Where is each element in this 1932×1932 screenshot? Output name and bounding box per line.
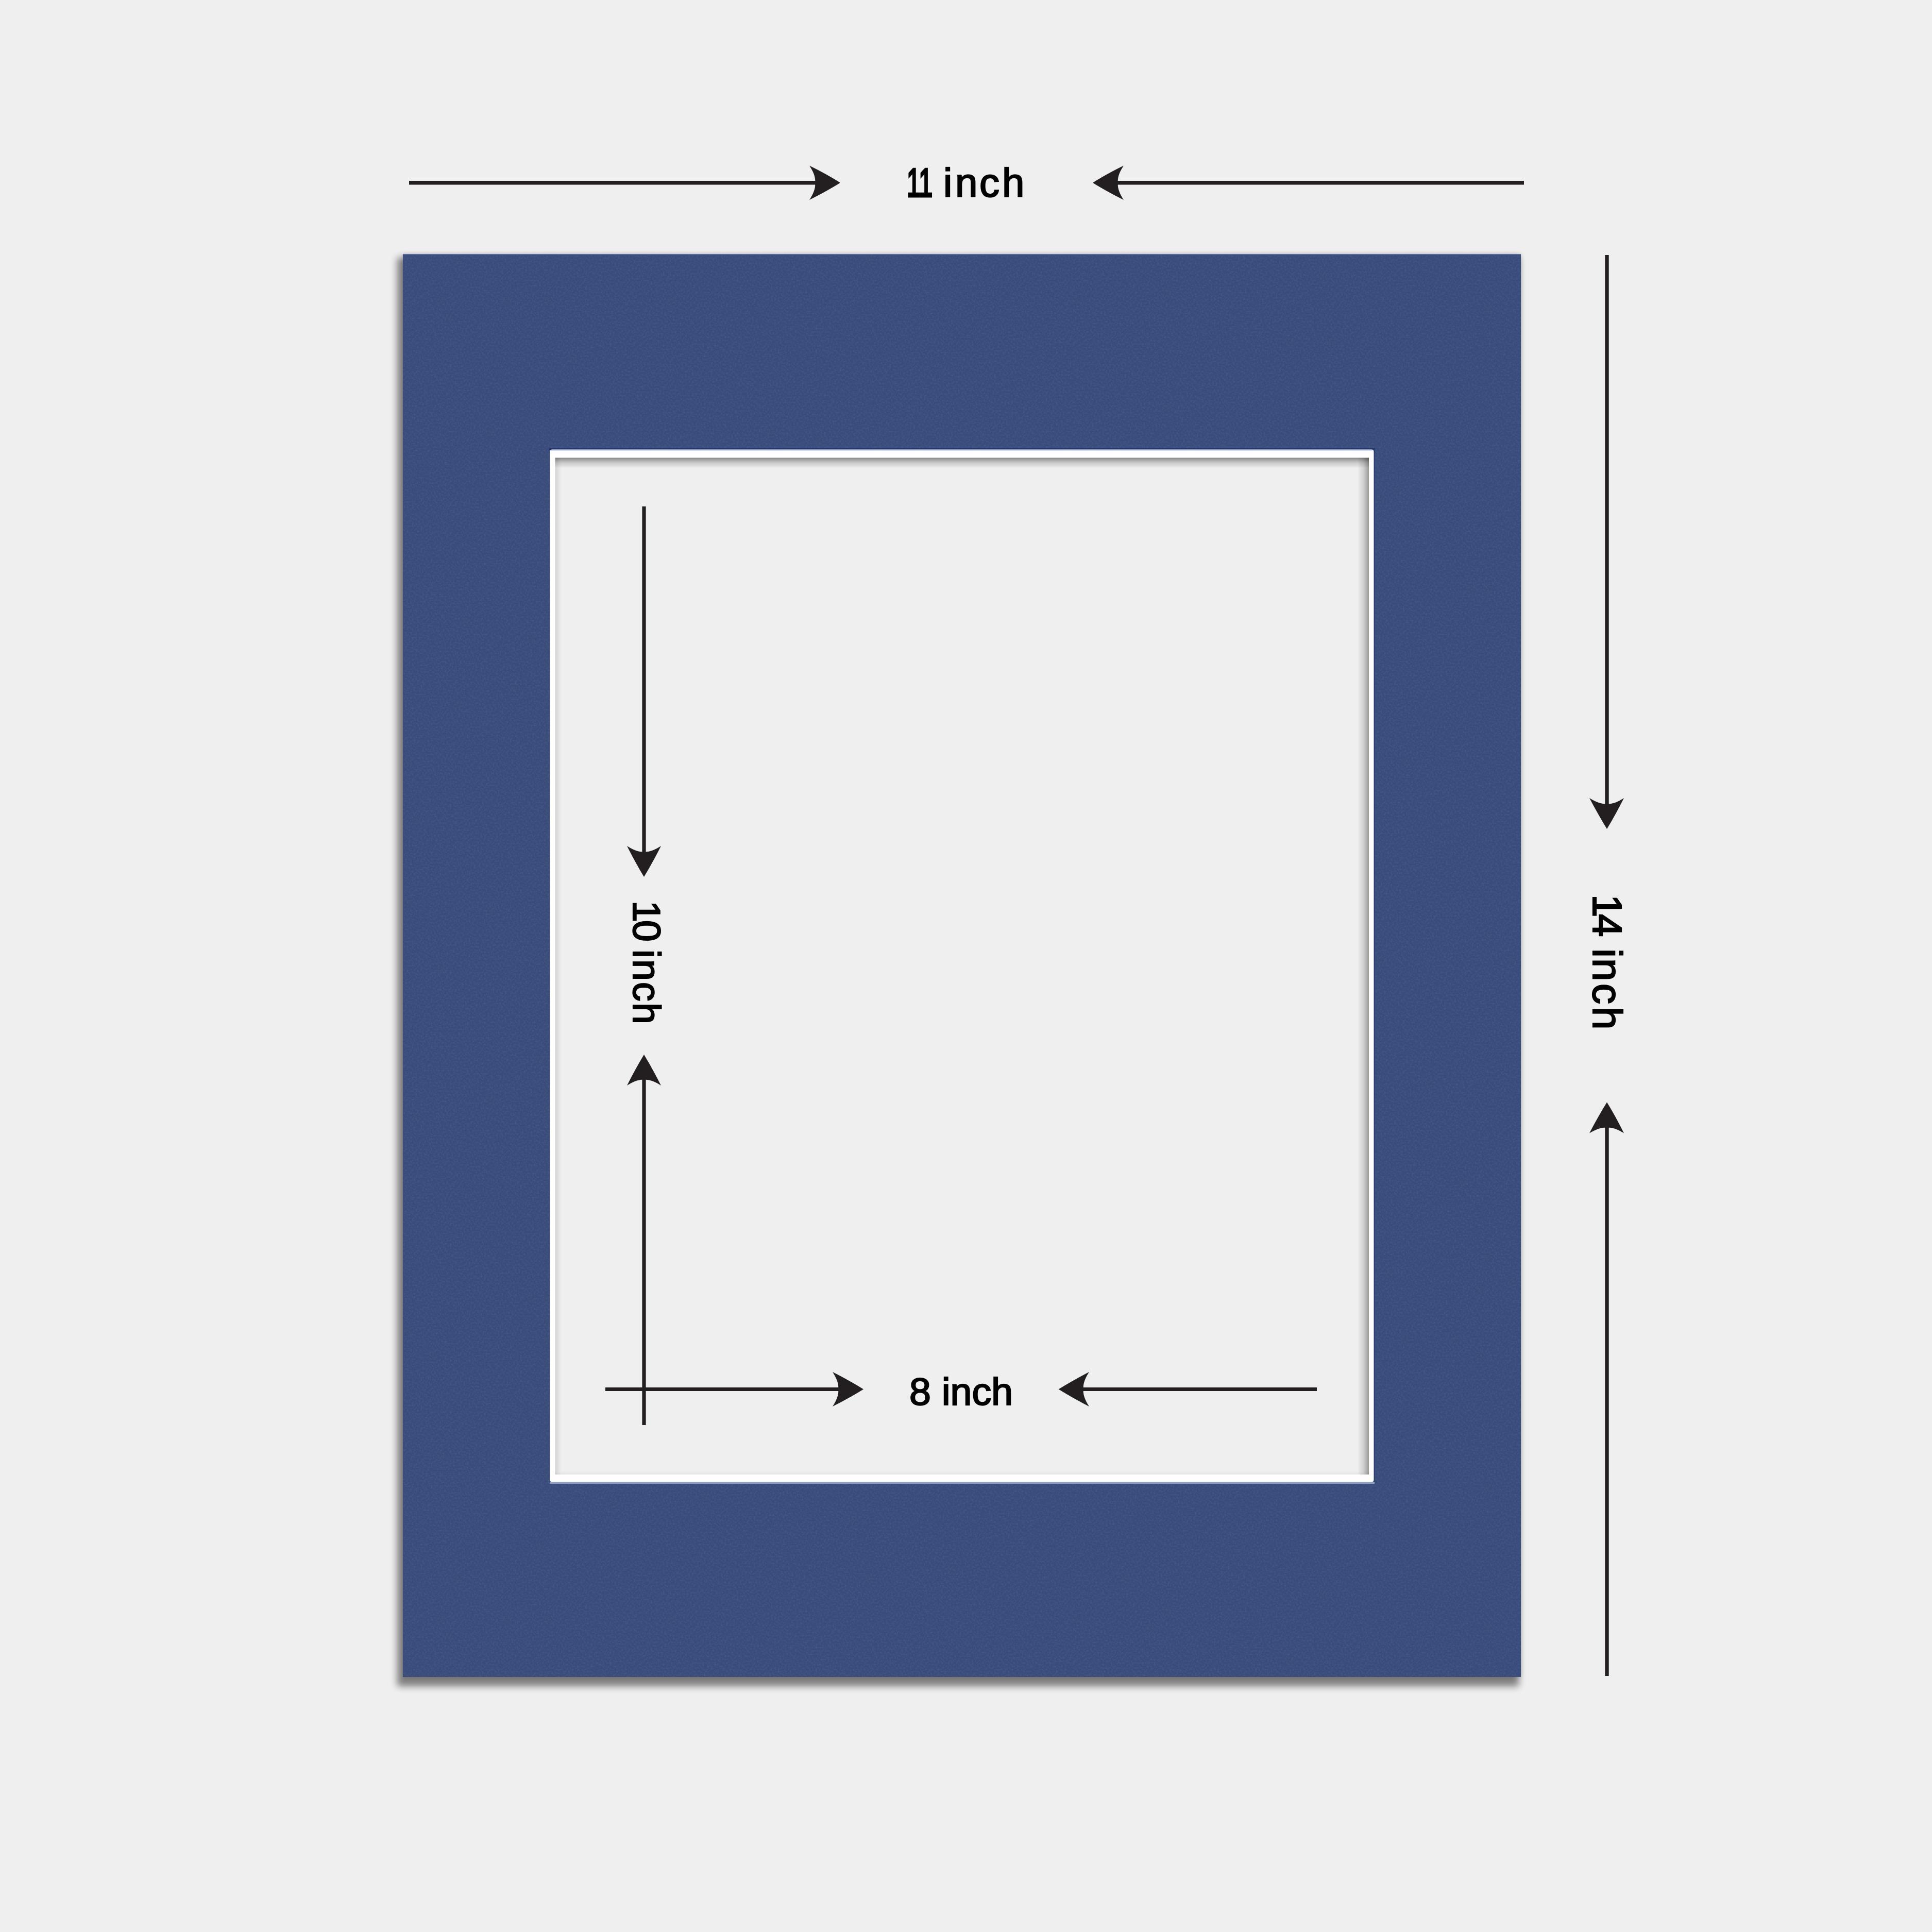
- arrow: inner height, upper segment: [627, 506, 661, 877]
- arrow: inner width, left segment: [605, 1372, 863, 1406]
- heading: 11 inch: inch: [943, 160, 1024, 206]
- window opening with inner shadows: [555, 457, 1369, 1475]
- arrow: top width, left segment: [409, 166, 840, 200]
- panel: blue mat board: [397, 254, 1521, 1686]
- arrow: top width, right segment: [1093, 166, 1524, 200]
- arrow: outer height, upper segment: [1589, 255, 1624, 829]
- label: 10 inch: 10 inch: [625, 901, 668, 1024]
- label: 14 inch: 14 inch: [1584, 894, 1630, 1029]
- heading: 11 inch: 11: [907, 160, 933, 206]
- heading: 11 inch: [907, 160, 1024, 206]
- arrow: inner height, lower segment: [627, 1055, 661, 1425]
- bevel: white mat opening edge: [549, 448, 1375, 1484]
- arrow: outer height, lower segment: [1589, 1103, 1624, 1676]
- arrow: inner width, right segment: [1059, 1372, 1317, 1406]
- label: 8 inch: 8 inch: [909, 1370, 1013, 1413]
